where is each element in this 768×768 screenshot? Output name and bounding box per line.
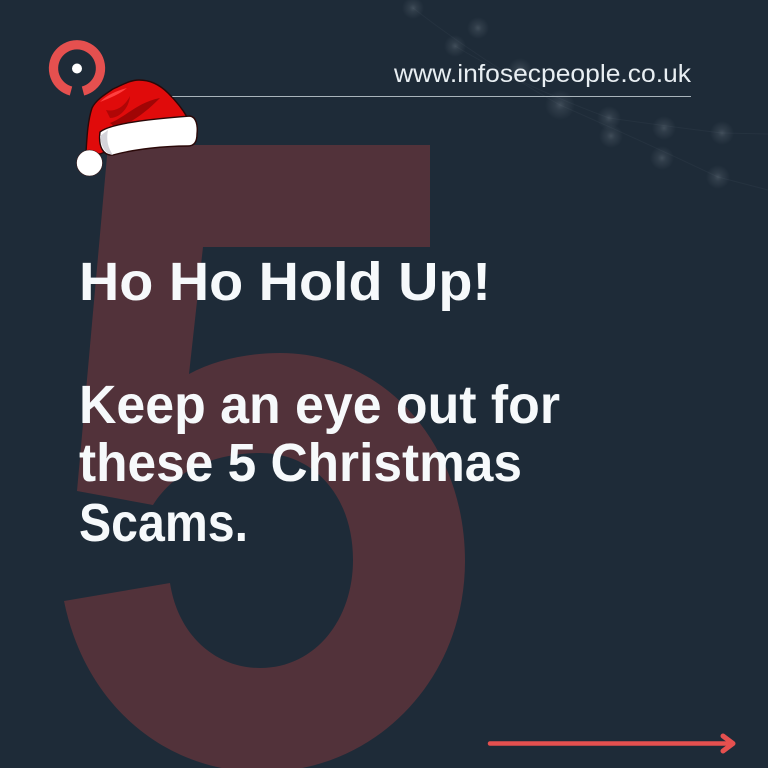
- website address: www.infosecpeople.co.uk: [393, 60, 692, 88]
- body text: keep an eye out: Keep an eye out for: [79, 375, 560, 435]
- website divider line: [165, 96, 691, 97]
- decorative fairy lights: [402, 0, 768, 190]
- body text: keep an eye out: these 5 Christmas: [79, 433, 522, 493]
- large background number 5: [64, 145, 465, 768]
- logo: red ring with dot: [54, 45, 100, 91]
- heading: Ho Ho Hold Up!: Ho Ho Hold Up!: [79, 252, 491, 312]
- icon: santa hat: [76, 80, 197, 176]
- body text: keep an eye out: [79, 375, 560, 553]
- arrow: next slide: [490, 736, 733, 751]
- body text: keep an eye out: Scams.: [79, 493, 248, 553]
